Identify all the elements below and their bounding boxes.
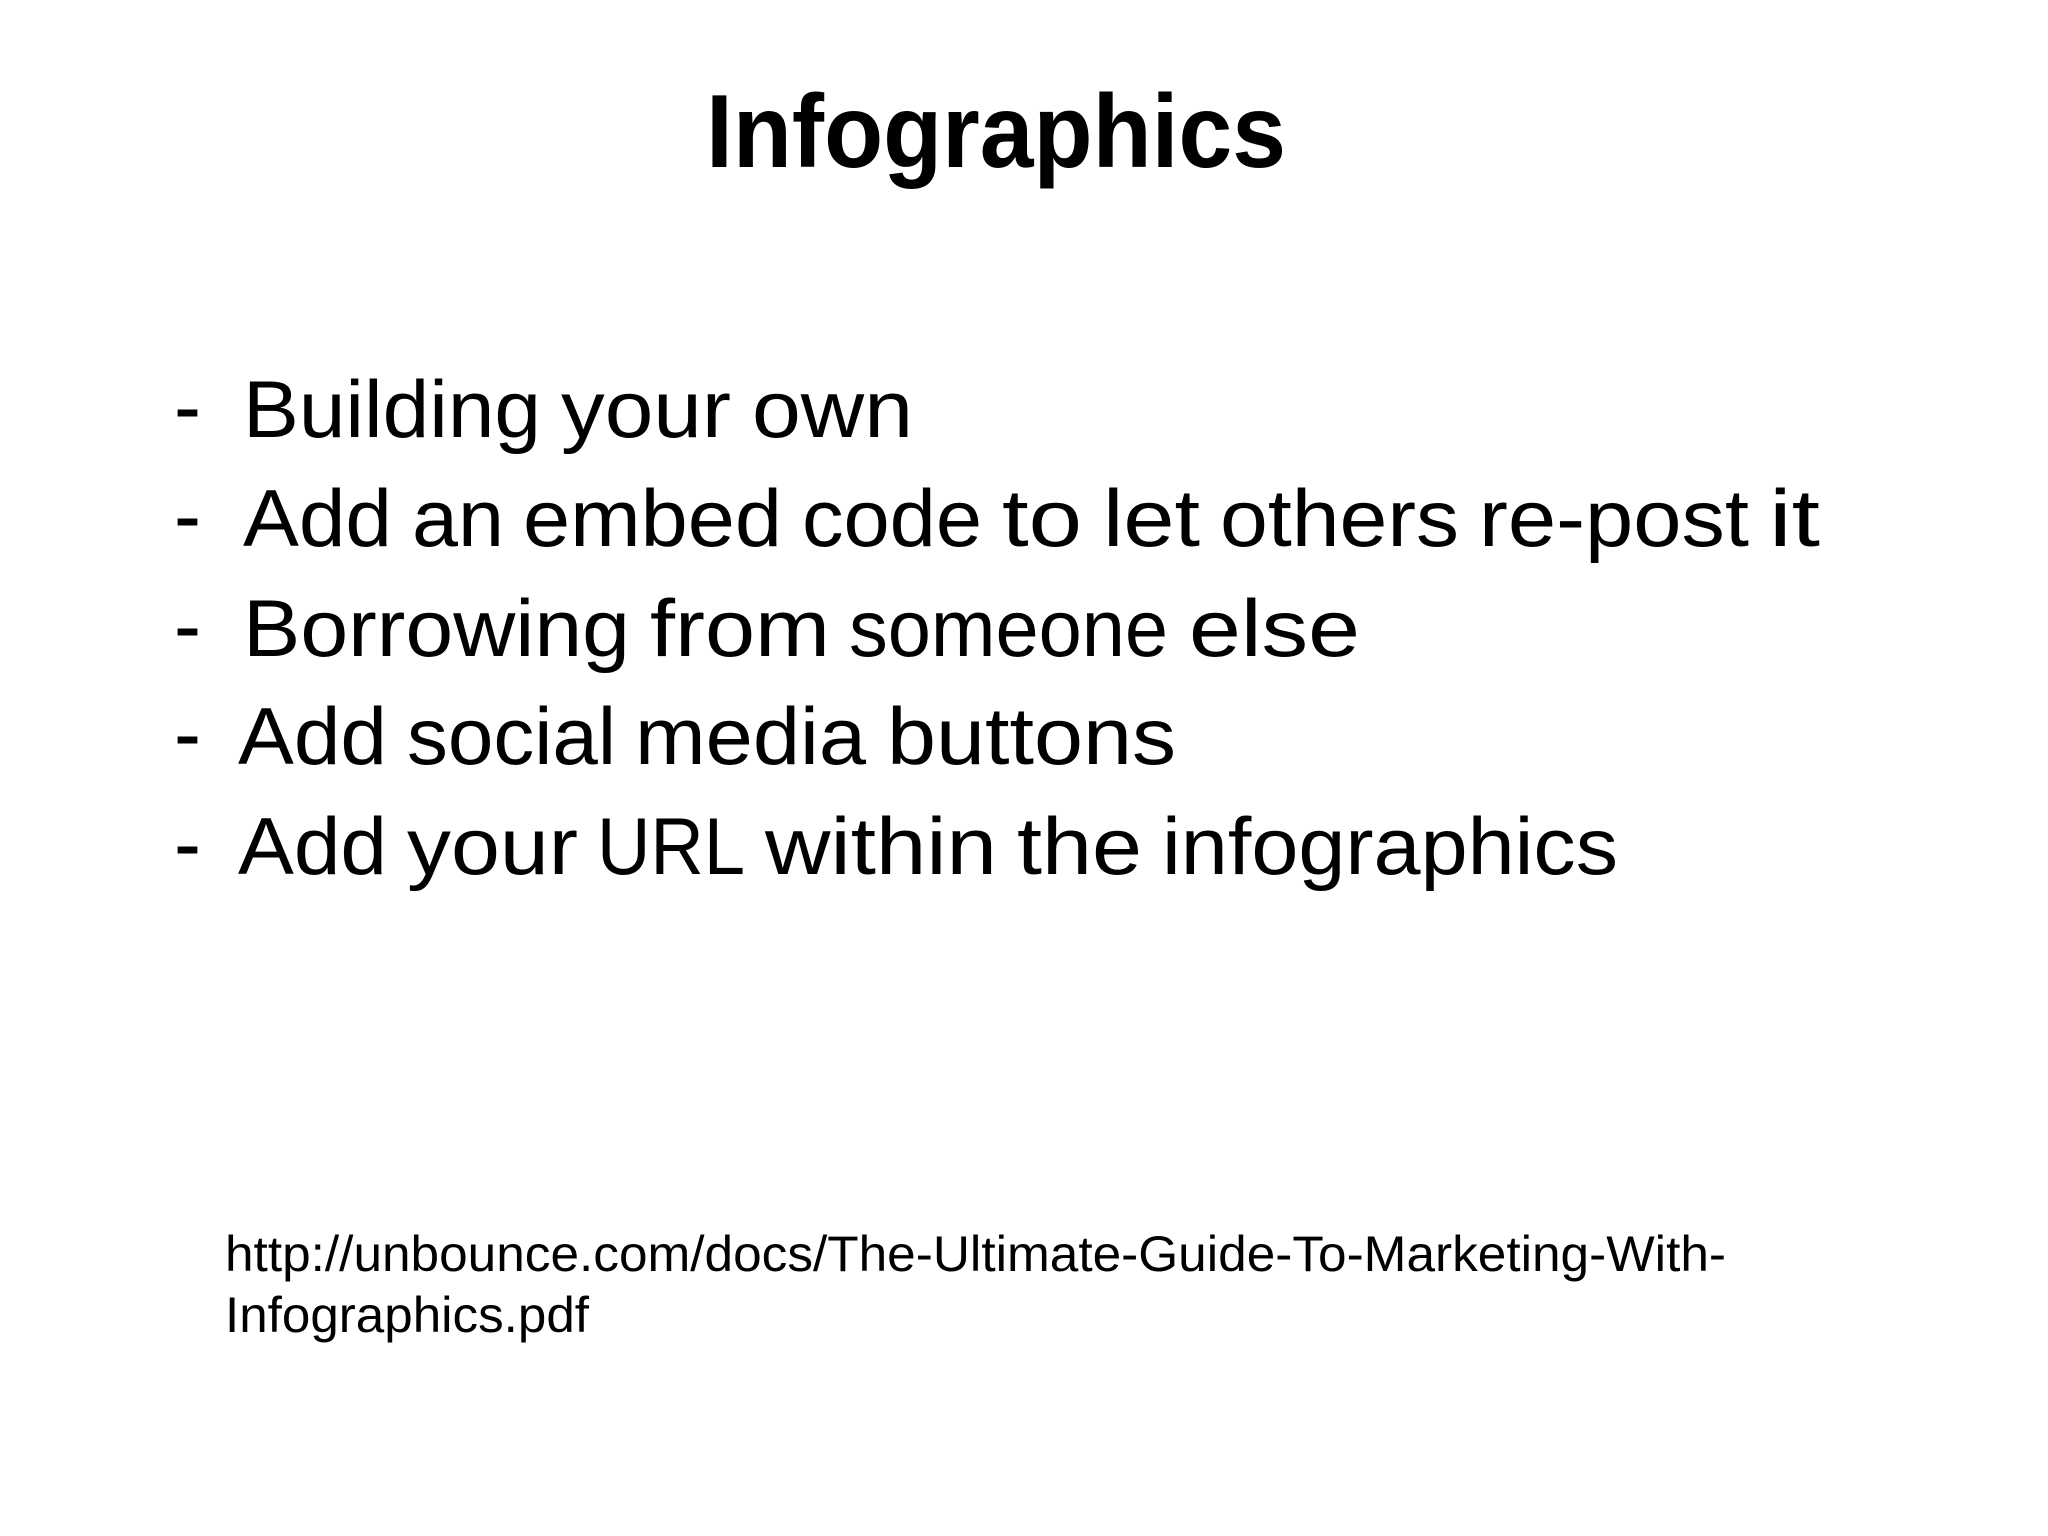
bullet: social media buttons: buttons	[887, 692, 1176, 782]
bullet: URL within infographics: Add	[238, 802, 387, 892]
bullet: embed code	[174, 466, 1820, 566]
bullet: embed code: embed	[523, 474, 782, 564]
bullet: embed code: others	[1220, 474, 1459, 564]
title: Infographics	[706, 74, 1286, 190]
bullet: building your own: your	[561, 365, 731, 455]
bullet: embed code: it	[1769, 474, 1820, 564]
bullet: URL within infographics: the	[1017, 802, 1142, 892]
bullet: borrowing: someone	[849, 584, 1168, 674]
bullet: embed code: to	[1002, 474, 1082, 564]
source link text	[225, 1226, 1726, 1343]
bullet: embed code: re-post	[1479, 474, 1749, 564]
bullet: URL within infographics: -	[174, 794, 201, 894]
bullet: building your own	[174, 357, 913, 457]
bullet: social media buttons: -	[174, 684, 201, 784]
bullet: social media buttons: social	[407, 692, 616, 782]
bullet: URL within infographics: infographics	[1162, 802, 1618, 892]
bullet: building your own: Building	[243, 365, 541, 455]
bullet: social media buttons	[174, 684, 1176, 784]
bullet: borrowing: else	[1189, 584, 1360, 674]
bullet: social media buttons: Add	[238, 692, 387, 782]
bullet: borrowing: from	[650, 584, 830, 674]
bullet: embed code: let	[1103, 474, 1200, 564]
bullet: social media buttons: media	[635, 692, 867, 782]
bullet: embed code: -	[174, 466, 201, 566]
source link text: http://unbounce.com/docs/The-Ultimate-Guide-To-Marketing-With-	[225, 1226, 1726, 1282]
bullet: borrowing	[174, 576, 1360, 676]
bullet: embed code: Add	[243, 474, 392, 564]
bullet: embed code: code	[802, 474, 982, 564]
bullet: URL within infographics: your	[407, 802, 578, 892]
bullet: building your own: -	[174, 357, 201, 457]
bullet: embed code: an	[412, 474, 504, 564]
bullet: borrowing: Borrowing	[243, 584, 630, 674]
bullet: borrowing: -	[174, 576, 201, 676]
source link text: Infographics.pdf	[225, 1287, 589, 1343]
bullet: building your own: own	[752, 365, 913, 455]
bullet list	[174, 357, 1820, 894]
bullet: URL within infographics	[174, 794, 1618, 894]
bullet: URL within infographics: within	[764, 802, 997, 892]
bullet: URL within infographics: URL	[597, 802, 745, 892]
